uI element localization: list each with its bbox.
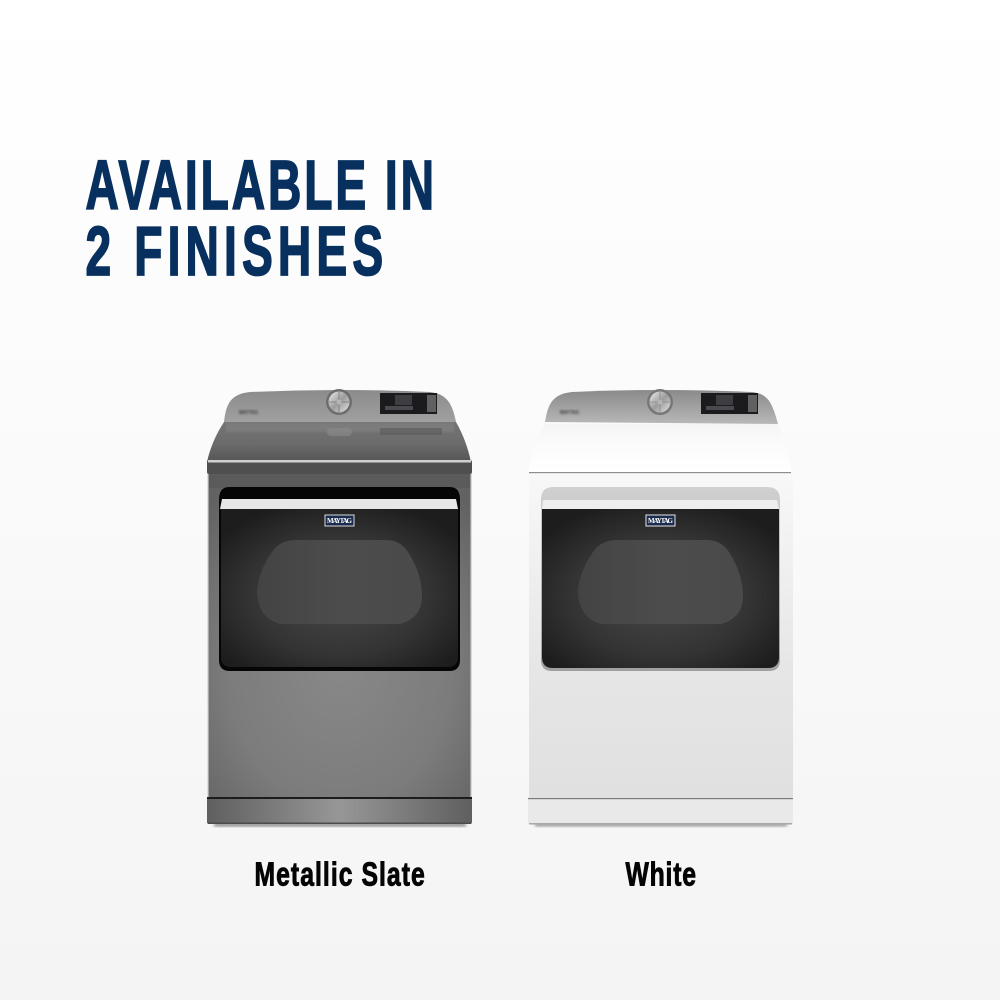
title: AVAILABLE IN [86,145,434,225]
title: 2 FINISHES [86,211,383,291]
door [219,487,460,671]
cabinet body [207,474,472,798]
dryer: metallic slate [207,389,472,827]
dryer: white [528,389,793,827]
base [528,798,793,824]
door [541,487,780,671]
badge: MAYTAG [648,517,674,525]
lid front edge [207,460,472,474]
door glass [221,509,458,667]
floor shadow [214,822,466,827]
console [224,390,456,422]
console brand text: MAYTAG [239,410,258,416]
badge [325,515,354,526]
title [86,145,434,291]
lid seam [529,472,791,473]
console brand text: MAYTAG [560,410,579,416]
door handle [542,500,779,509]
control knob [326,389,352,415]
display panel [380,393,437,414]
label: metallic slate: Metallic Slate [254,857,425,893]
door handle [220,499,458,509]
display panel [701,393,758,414]
cabinet body [529,474,793,798]
control knob [647,389,673,415]
drum window [257,540,422,624]
lid [529,424,791,472]
floor shadow [535,822,787,827]
console [545,390,778,424]
lid [207,422,471,462]
base [207,798,472,824]
door glass [542,509,779,668]
badge [646,515,675,526]
badge: MAYTAG [327,517,353,525]
label: white: White [626,857,696,893]
drum window [578,540,743,624]
